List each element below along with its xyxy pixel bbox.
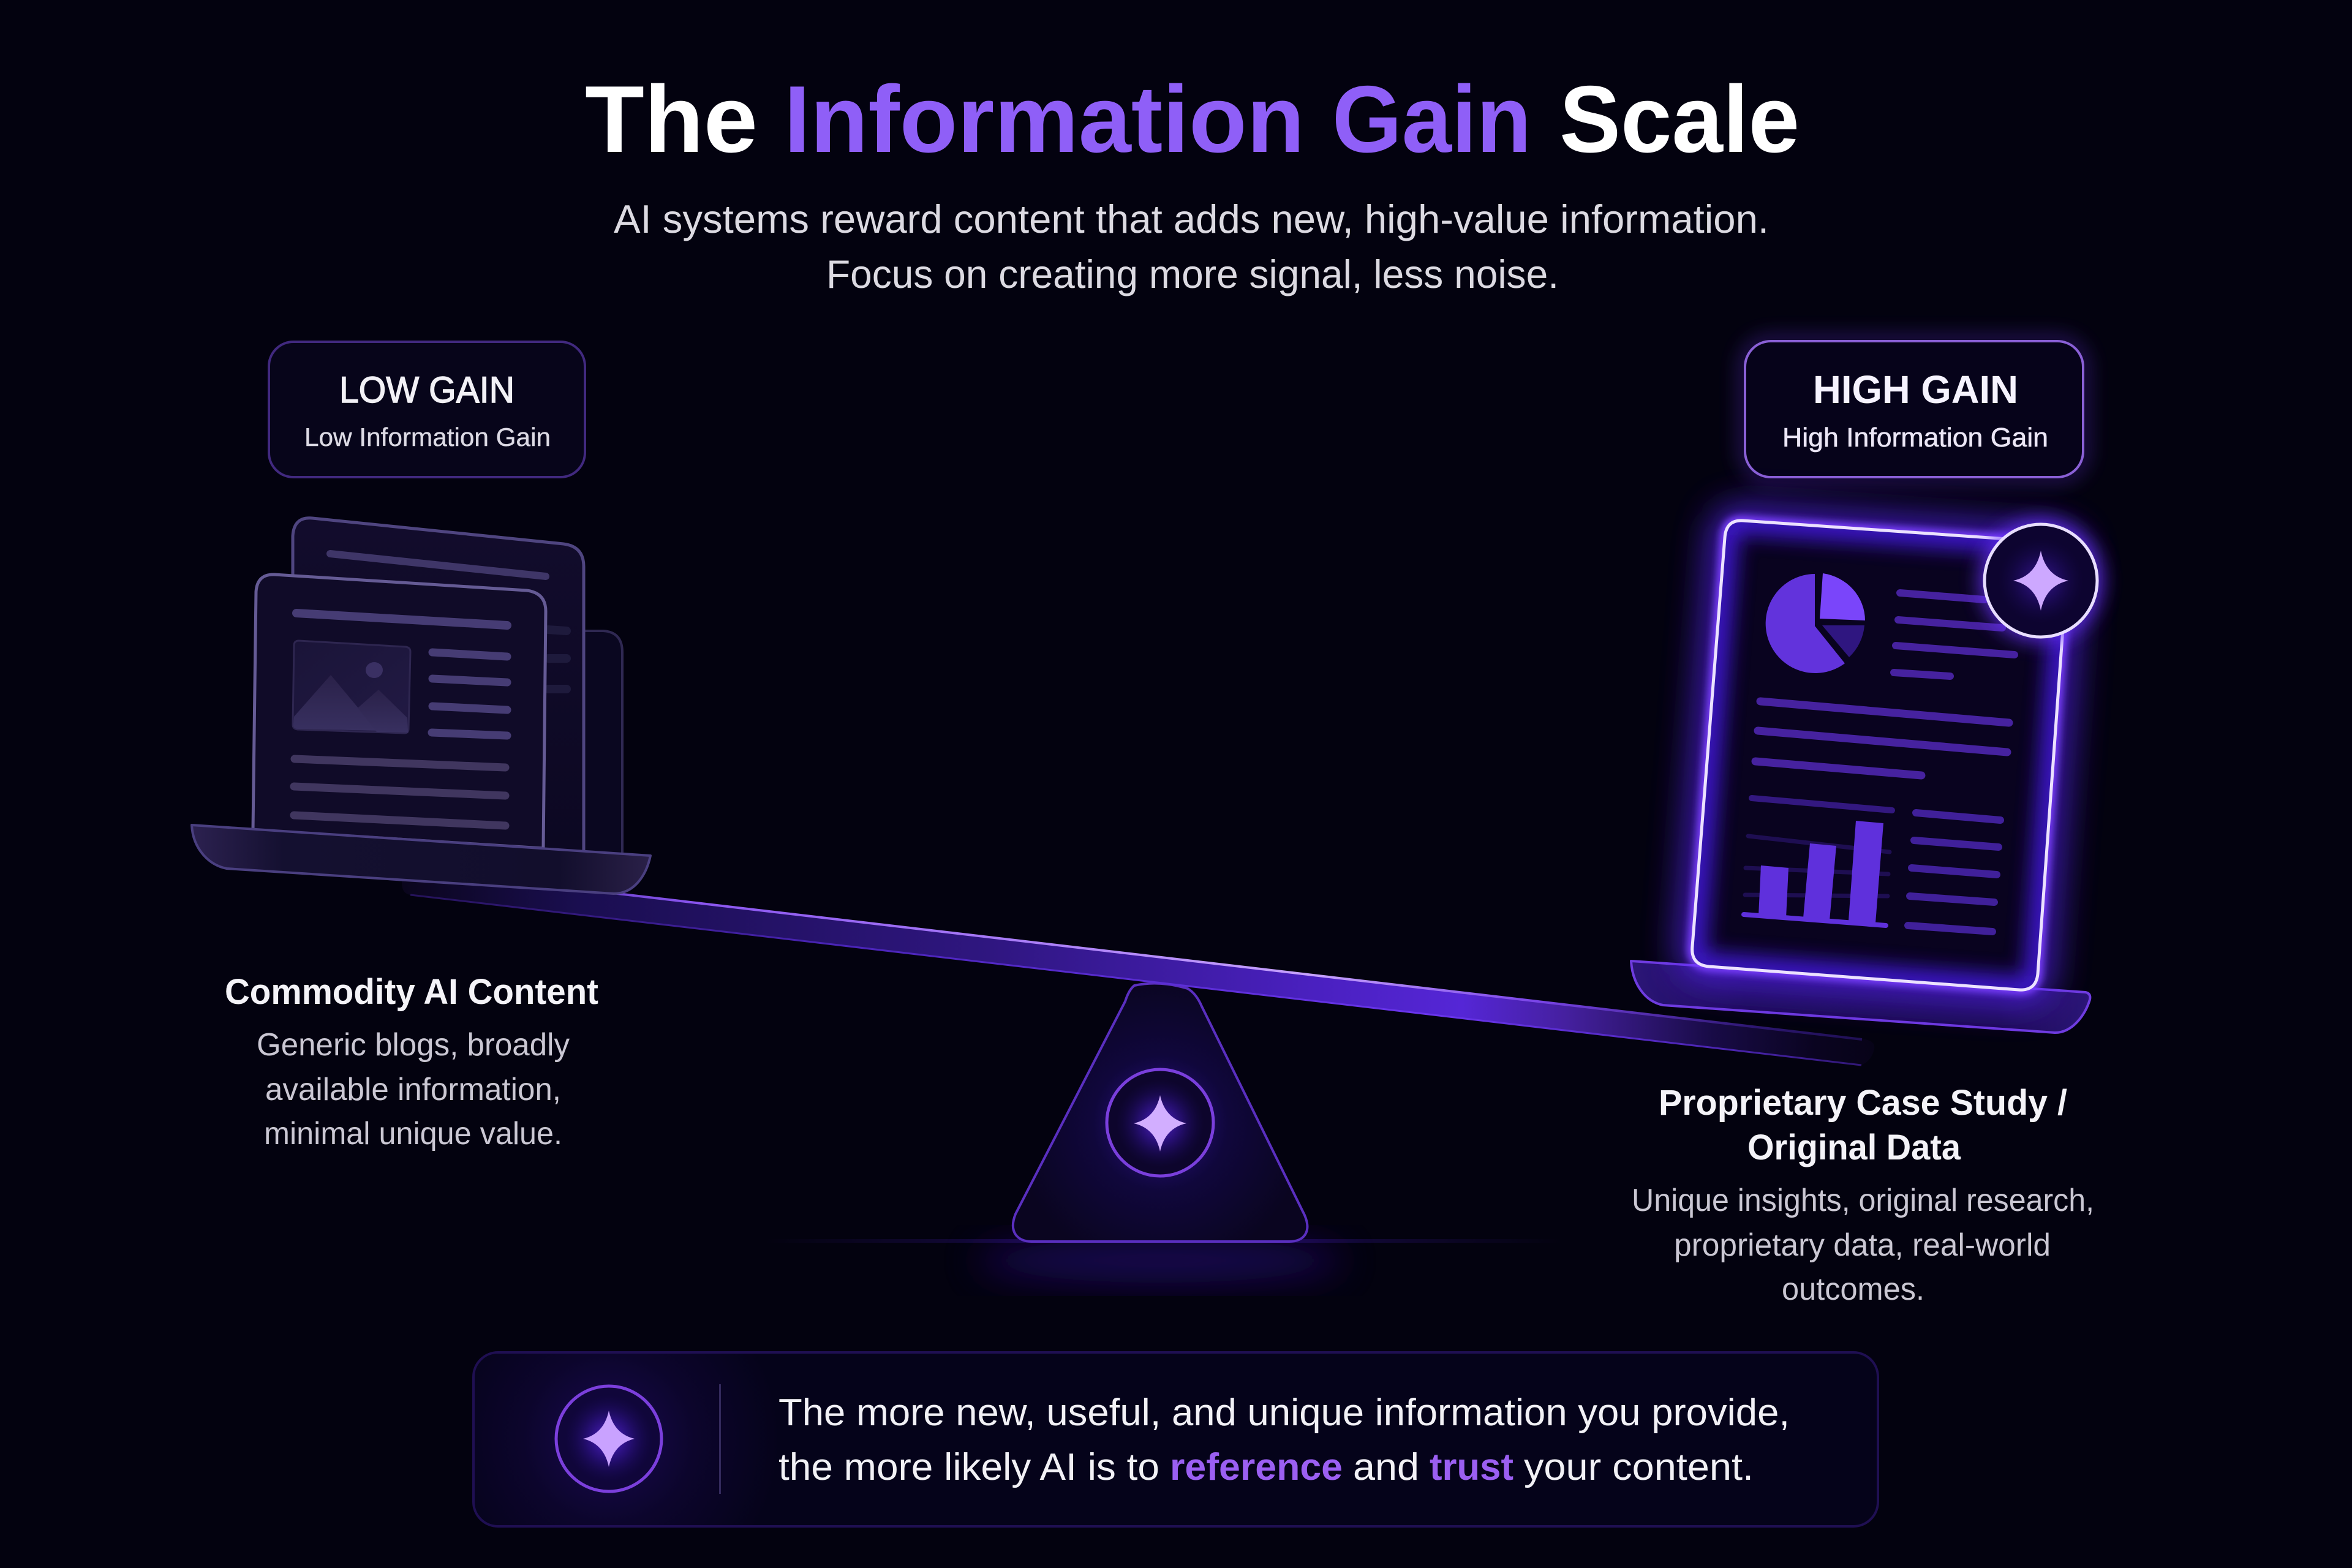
- floor glow: [766, 1238, 1562, 1283]
- high gain tray: [1631, 961, 2090, 1033]
- subtitle: AI systems reward content that adds new, high-value information.: [614, 197, 1769, 241]
- third page, rear right: [539, 631, 622, 854]
- takeaway text: your content.: [1524, 1446, 1754, 1488]
- pie chart: [1766, 573, 1865, 673]
- high gain description: [1632, 1083, 2094, 1307]
- title: Scale: [1559, 66, 1800, 172]
- low gain description: Generic blogs, broadly: [257, 1027, 570, 1063]
- high gain label: High Information Gain: [1782, 423, 2048, 453]
- low gain description: [225, 972, 598, 1152]
- scale beam: [402, 868, 1874, 1065]
- takeaway text: and: [1353, 1446, 1419, 1488]
- high gain description: outcomes.: [1782, 1272, 1924, 1307]
- image placeholder: [293, 641, 410, 733]
- low gain description: Commodity AI Content: [225, 972, 598, 1012]
- low gain document stack: [253, 518, 622, 854]
- takeaway text: reference: [1170, 1446, 1343, 1488]
- second page, rear: [293, 518, 584, 854]
- takeaway panel: [473, 1352, 1878, 1526]
- icon: takeaway sparkle: [556, 1386, 662, 1491]
- low gain tray: [192, 825, 650, 894]
- high gain description: proprietary data, real-world: [1674, 1227, 2051, 1263]
- icon: document sparkle badge: [1980, 519, 2102, 642]
- high gain description: Original Data: [1747, 1128, 1961, 1167]
- high gain description: Unique insights, original research,: [1632, 1183, 2094, 1218]
- takeaway text: the more likely AI is to: [778, 1446, 1159, 1488]
- takeaway text: The more new, useful, and unique information you provide,: [778, 1392, 1790, 1434]
- low gain description: minimal unique value.: [264, 1116, 562, 1152]
- title: Information: [784, 66, 1305, 172]
- title: [585, 66, 1800, 172]
- low gain label: Low Information Gain: [304, 423, 551, 451]
- subtitle: Focus on creating more signal, less noise.: [826, 252, 1559, 296]
- front page: [253, 575, 546, 848]
- high gain label: HIGH GAIN: [1813, 368, 2018, 412]
- high gain description: Proprietary Case Study /: [1659, 1083, 2067, 1123]
- scale fulcrum: [1013, 983, 1307, 1242]
- low gain label: [269, 342, 585, 477]
- low gain label: LOW GAIN: [339, 369, 514, 410]
- high gain label: [1745, 341, 2083, 477]
- low gain description: available information,: [265, 1072, 561, 1107]
- subtitle: [614, 197, 1769, 296]
- title: Gain: [1332, 66, 1531, 172]
- icon: fulcrum sparkle: [1091, 1054, 1229, 1191]
- takeaway text: trust: [1430, 1446, 1513, 1488]
- title: The: [585, 66, 758, 172]
- high gain document: [1692, 519, 2102, 990]
- bar chart: [1744, 821, 1886, 925]
- takeaway text: [778, 1392, 1790, 1488]
